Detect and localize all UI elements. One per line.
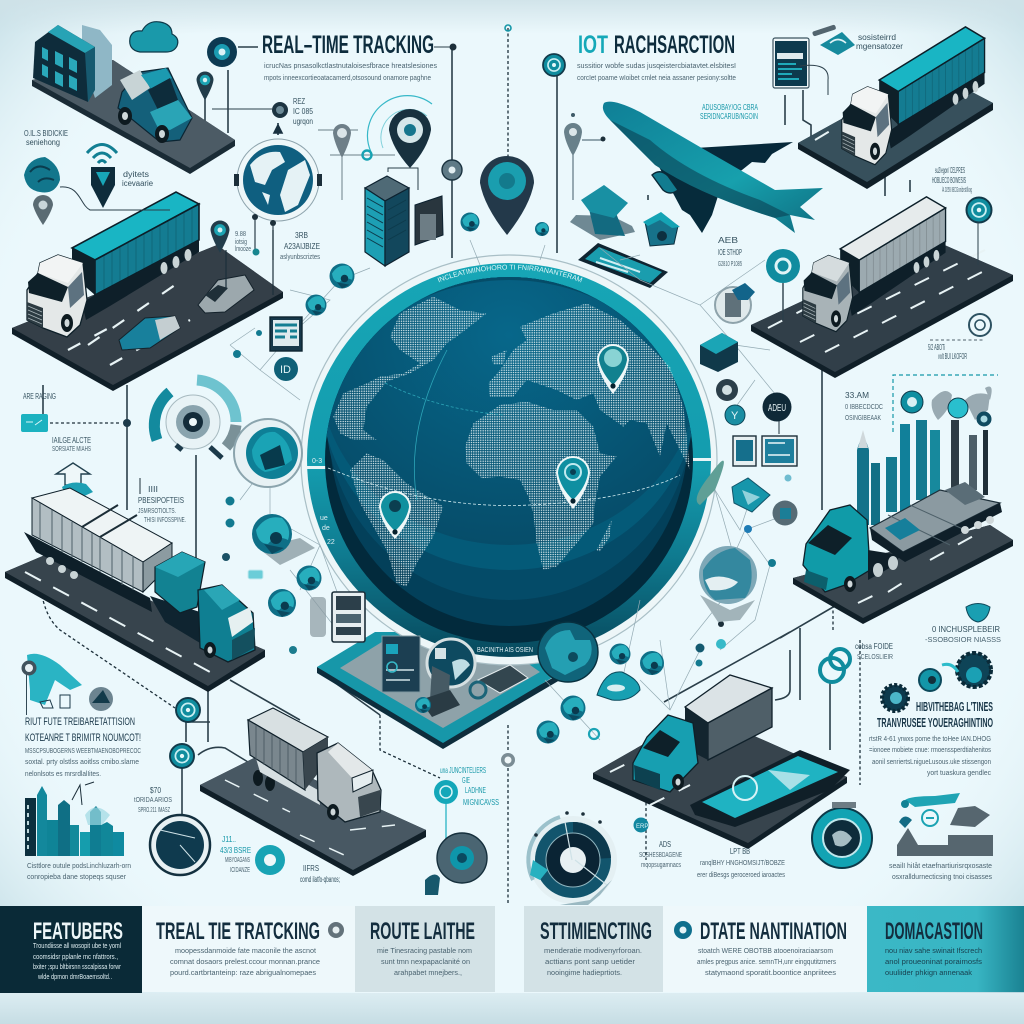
title: IoT Rachsarction: IOT [578, 31, 608, 59]
text: top right labels: SERIDNCARUB/NGOIN [700, 112, 758, 121]
icon: teal lollipop node [766, 249, 800, 320]
icon: blue car [119, 316, 180, 350]
text: lower right details: LPT BB [730, 847, 750, 856]
connector lines [43, 28, 998, 905]
text: bottom left small labels: MIBYOAGANS [225, 857, 250, 864]
icon: left nodes on bottom [150, 698, 210, 875]
chart: left bar chart [25, 782, 124, 856]
title: Real-Time Tracking: mpots inneexcortieoatacamerd,otsosound onamore paghne [264, 75, 431, 82]
card: Sttimiencting: nooingime hadieprtiots. [547, 970, 622, 977]
text: globe stats: 9.88 [235, 231, 246, 238]
card: Route Laithe: arahpabet mnejbers., [394, 970, 462, 977]
text: globe stats: 3RB [295, 231, 308, 240]
icon: large dark location pin [362, 96, 432, 168]
card: Treal Tie Tratcking: moopessdanmoide fate maconile the ascnot [175, 948, 316, 955]
text: globe stats [235, 231, 320, 261]
text: top right labels: mgensatozer [856, 42, 903, 51]
continents dotted map [333, 297, 690, 587]
globe body [326, 277, 692, 626]
icon: smartphone [690, 750, 850, 827]
icon: gray car [198, 275, 254, 313]
icon: upper left of text block [22, 654, 113, 715]
text: side labels: O.IL.S BIDICKIE [24, 129, 68, 138]
label: incubator tag: -SSOBOSIOR NIASSS [925, 637, 1001, 644]
card: Treal Tie Tratcking: pourd.cartbrtanteinp: raze abrigualnomepaes [170, 970, 317, 977]
text: bottom left small labels: 43/3 BSRE [220, 846, 251, 855]
text block: left: KOTEANRE T BRIMITR NOUMCOT! [25, 732, 141, 744]
text: bottom left small labels: ICIDANZE [230, 867, 250, 874]
icon: pin on road [196, 72, 214, 100]
text: bottom left small labels [134, 786, 340, 884]
text: globe stats: A23AIJBIZE [284, 242, 320, 251]
icon: right sphere cluster [697, 461, 798, 622]
text: right truck labels [932, 166, 992, 265]
text: bottom left small labels: tORIDA ARIOS [134, 797, 172, 804]
panel: central platform devices [382, 636, 528, 717]
icon: small globe [234, 123, 322, 260]
icon: factory [897, 793, 993, 856]
text: House label: G2810 P1085 [718, 261, 742, 268]
pin: Asia [597, 344, 629, 394]
panel: bottom center truck [200, 708, 426, 876]
card: Treal Tie Tratcking: TREAL TIE TRATCKING [156, 918, 320, 945]
text: chart caption: Cisttlore outule podsLinchluzarh-orn [27, 863, 131, 870]
ring labels: BACINITH AIS OSIEN [477, 647, 533, 654]
text: right lower label [928, 314, 991, 361]
cargo stack [32, 488, 172, 592]
text block: left: RIUT FUTE TREIBARETATTISION [25, 716, 135, 728]
card: Treal Tie Tratcking: comnat dosaors prelest.ccour monnan.prance [170, 959, 320, 966]
icon: center top location pin [480, 156, 534, 235]
icon: device cluster bottom [536, 621, 726, 744]
pin: Africa [556, 456, 590, 509]
text: factory label: 0 IBBECDCDC [845, 404, 883, 411]
icon: upload arrow [56, 463, 93, 501]
label: incubator tag [925, 604, 1001, 644]
card: Featubers [0, 906, 142, 993]
icon: gray location pin [318, 124, 395, 200]
text: right truck labels: su2/egon/ CELPRES [935, 166, 965, 175]
card: Featubers: coomsidsr pplanle mc nfattrors., [33, 954, 118, 961]
card: Sttimiencting [524, 906, 663, 992]
ring labels: 22 [327, 539, 335, 546]
text: House label: AEB [718, 236, 738, 245]
text: side labels: dyitets [123, 170, 149, 179]
text: factory label: OSINGIBEAAK [845, 415, 881, 422]
icon: cloud [130, 22, 178, 52]
ring labels: ue [320, 515, 328, 522]
text: House label [718, 236, 742, 268]
icon: right cluster near ring [700, 283, 755, 425]
card: Dtate Nantination: statymaond sporatit.boontice anpriitees [705, 970, 837, 977]
text: chart caption [27, 863, 131, 881]
label: teal junctions: LADHNE [465, 786, 486, 795]
panel: building and delivery truck [32, 25, 235, 174]
label: small data point: REZ [293, 97, 305, 106]
card: Route Laithe [355, 906, 495, 992]
icon: server rack panel [310, 592, 365, 642]
text block: left: MSSCPSUBOGERNS WEEBTMAENOBOPRECOC [25, 748, 141, 755]
card: Dtate Nantination: stoatch WERE OBOTBB atooenoiraciaarsom [698, 948, 833, 955]
text block: left: soxtal. prty olstlss aoitlss cmibo.slame [25, 759, 139, 766]
icon: left network nodes: ID [280, 364, 291, 376]
label: ADS small node [634, 818, 682, 869]
text block: transverse [869, 699, 993, 777]
text: top right labels: sosisteirrd [858, 33, 896, 42]
text: right truck labels: HOBLIECO BOWESIS [932, 176, 966, 185]
panel: truck with smartphone [593, 675, 850, 849]
magnifier [427, 639, 475, 708]
text: bottom left small labels: $70 [150, 786, 161, 795]
panel: features footer [0, 906, 1024, 993]
text block: transverse: yort tuaskura gendlec [927, 770, 991, 777]
text: presipofices [138, 478, 186, 524]
label: small data point: ugrqon [293, 117, 313, 126]
text: side labels: seniehong [26, 138, 60, 147]
icon: title node [434, 25, 511, 50]
text: right lower label: 5/2 ABOTi [928, 343, 945, 352]
ring labels [312, 458, 533, 654]
panel: right flatbed factory truck [793, 386, 1013, 624]
icon: central bottom radar gauge [528, 811, 617, 905]
title: Real-Time Tracking: REAL–TIME TRACKING [262, 31, 434, 59]
label: card and alert: IAILGE ALCTE [52, 436, 91, 445]
label: Foide node: cobsa FOIDE [855, 642, 893, 651]
icon: airplane [603, 102, 823, 233]
icon: teal road pin [210, 220, 273, 295]
text: factory caption: osxralldurnecticsing tnoi cisasses [892, 874, 992, 881]
card: Route Laithe: ROUTE LAITHE [370, 918, 475, 945]
text: globe stats: aslyunbscriztes [280, 254, 320, 261]
text: lower right details: ranqlBHY HNGHOMSIJT/BOBZE [700, 860, 785, 867]
icon: bottom gear [425, 753, 515, 895]
text block: transverse: aonil senriertsLnigueLusous.uke stissengon [872, 759, 991, 766]
keyboard [478, 665, 528, 693]
icon: teal map blob with pin [24, 157, 170, 225]
text: right truck labels: l4.0255 IBCGonibrstIlkog [942, 187, 972, 194]
text: top right labels [700, 33, 903, 121]
card: Sttimiencting: STTIMIENCTING [540, 918, 652, 945]
icon: tablet [773, 38, 828, 95]
card: Dtate Nantination [663, 906, 867, 992]
panel: left middle truck [12, 192, 283, 391]
title: IoT Rachsarction [577, 31, 736, 82]
screen [382, 636, 420, 692]
panel: central data platform base [317, 632, 565, 749]
label: incubator tag: 0 INCHUSPLEBEIR [932, 625, 1000, 634]
icon: left circular badge [222, 419, 322, 654]
label: teal junctions [434, 766, 499, 840]
card: Domacastion: anol proueoninat poraimosfs [885, 959, 983, 966]
label: Foide node [820, 642, 893, 682]
card: Domacastion: ouuliider phkign annenaak [885, 970, 973, 977]
text: presipofices: PBESIPOFTEIS [138, 496, 184, 505]
card: Featubers: FEATUBERS [33, 918, 123, 945]
ring labels: de [322, 525, 330, 532]
label: ADS small node: ERP [636, 824, 648, 830]
text: globe stats: iotsig [235, 239, 247, 246]
card: Treal Tie Tratcking [142, 906, 355, 992]
icon: small gray pin right [564, 113, 606, 200]
label: teal junctions: MIGNICAVSS [463, 798, 499, 807]
text: bottom left small labels: comd ilatfo-qbanos; [300, 875, 340, 884]
icon: wifi shield pin [87, 144, 117, 208]
icon: right cluster near ring: Y [731, 410, 739, 422]
label: card and alert [21, 392, 131, 453]
text: side labels [24, 129, 154, 188]
icon: signal tag [812, 24, 855, 55]
text: factory label [845, 391, 883, 422]
text: House label: IOE STHOP [718, 248, 742, 257]
icon: tablet near ring [578, 243, 668, 288]
label: small data point [212, 97, 313, 126]
label: card and alert: ARE RAGING [23, 392, 56, 401]
truck box [685, 675, 772, 723]
label: card and alert: SORSIATE MIAHS [52, 446, 91, 453]
text: globe stats: lmooze [235, 246, 251, 253]
label: small data point: IC 085 [293, 107, 313, 116]
icon: blue pickup truck [118, 68, 192, 143]
globe route lines [328, 350, 680, 506]
card: Domacastion [867, 906, 1024, 992]
text: right lower label: volt BUI LKOFOR [938, 352, 967, 361]
label: teal junctions: una JUNCINTELIERS [440, 766, 486, 775]
ring labels: 0-3 [312, 458, 322, 465]
panel: flatbed truck with cargo [5, 463, 265, 692]
text: top right labels: ADUSOBAY/OG CBRA [702, 103, 758, 112]
text: bottom left small labels: SPRO.211 IMASZ [138, 807, 170, 814]
text: factory caption [889, 862, 992, 881]
text: presipofices: IIII [148, 485, 158, 494]
card: Sttimiencting: menderatie modivenyrforoan. [544, 948, 642, 955]
label: ADS small node: SOSHESBDAGENE [639, 852, 682, 859]
icon: top right node [543, 54, 565, 76]
icon: pin node on line [442, 160, 462, 180]
text: bottom left small labels: J11.. [222, 835, 236, 844]
ring heading: INCLEATIMINOHORO TI FNIRRANANTERAM [438, 264, 582, 282]
text: presipofices: JSMRSOTIOLTS. [138, 508, 176, 515]
panel: top right truck [798, 27, 993, 189]
text: factory caption: seailI hiIåt etaefnartiurisrqxosaste [889, 862, 992, 870]
card: Featubers: bxiter ;spu bltbirsnn sscalpissa forwr [33, 964, 122, 971]
card: Route Laithe: mie Tinesracing pastable nom [377, 948, 472, 955]
title: IoT Rachsarction: sussitior wobfe sudas jusqeistercbiatavtet.elsbitesI [577, 63, 736, 70]
icon: office building [33, 25, 112, 102]
text block: left [25, 716, 141, 778]
text block: transverse: rtstR 4-61 yrwxs pome the toHee IAN.DHOG [869, 736, 991, 743]
text: lower right details: erer diBesgs geroceroed iaroactes [697, 872, 785, 879]
card: Dtate Nantination: DTATE NANTINATION [700, 918, 847, 945]
pin: South America [379, 491, 411, 539]
text block: transverse: =ionoee mobiete cnue: rmoenssperdtiahenitos [869, 747, 991, 754]
card: Dtate Nantination: amles pregpus anice. semnTH,unr eingqutitzmers [697, 959, 836, 966]
icon: ADEU badge and screens [733, 392, 797, 466]
icon: gears [882, 653, 991, 711]
label: Foide node: SCELOSLIEIR [857, 654, 893, 661]
text: presipofices: THISI INFOSSPINE. [144, 517, 186, 524]
icon: top left tracking node [207, 37, 237, 67]
chart bars on flatbed [857, 386, 992, 525]
icon: large teal sphere [538, 622, 598, 682]
icon: left network nodes [233, 264, 354, 381]
icon: ADEU badge and screens: ADEU [768, 403, 786, 414]
location pins [379, 344, 629, 539]
card: Route Laithe: sunt tmn nexpapaclanité on [381, 959, 470, 966]
card: Featubers: Troundiisse all wosopit ube te yoml [33, 943, 121, 950]
text: side labels: icevaarie [122, 179, 154, 188]
panel: right middle truck [751, 197, 1013, 378]
card: Sttimiencting: acttians pont sanp uetider [545, 959, 636, 966]
icon: server tower [365, 168, 443, 266]
title: IoT Rachsarction: corcIet poame wIoibet cmlet neia assaner pesiony:soltte [577, 75, 736, 82]
text: factory label: 33.AM [845, 391, 869, 400]
text block: left: nelonlsots es mrsrdlalIites. [25, 771, 101, 778]
card: Domacastion: nou niav sahe swinait Ifscrech [885, 948, 982, 955]
text: bottom left small labels: IIFRS [303, 864, 319, 873]
label: ADS small node: mqopsugamnacs [641, 862, 681, 869]
label: ADS small node: ADS [659, 840, 671, 849]
icon: houses [460, 185, 680, 246]
factory nodes [901, 391, 992, 426]
panel: globe [300, 254, 718, 666]
text: lower right details [697, 847, 785, 879]
title: Real-Time Tracking: icrucNas pnsasolkctlastnutaloisesfbrace hreatslesiones [264, 63, 437, 70]
label: teal junctions: GIE [462, 776, 470, 785]
title: Real-Time Tracking [262, 31, 437, 82]
icon: teal camera badge [812, 802, 872, 868]
icon: gauge left [154, 380, 236, 458]
network: links around globe [230, 240, 785, 740]
card: Featubers: wlde dpmon dmrBoaemsoltd.. [37, 974, 112, 981]
text: chart caption: conropieba dane stopeqs squser [27, 874, 127, 881]
title: IoT Rachsarction: RACHSARCTION [614, 31, 735, 59]
